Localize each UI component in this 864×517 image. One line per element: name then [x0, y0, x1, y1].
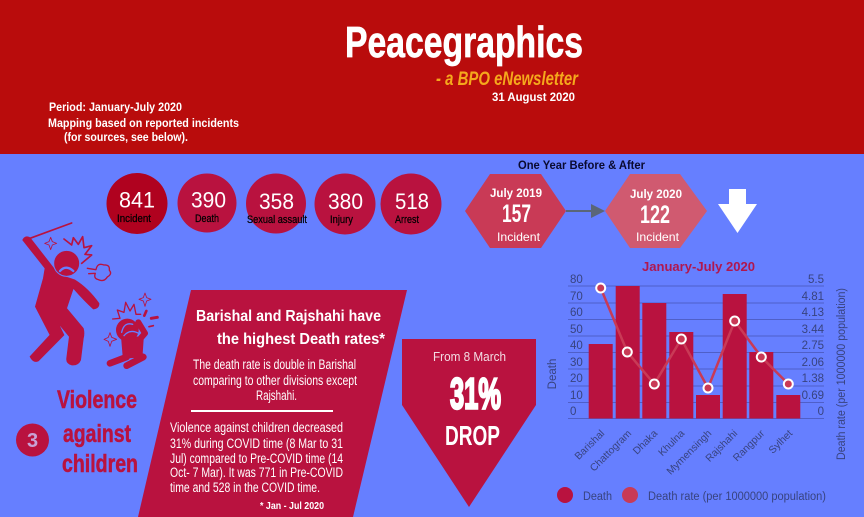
footnote: * Jan - Jul 2020 — [260, 501, 324, 512]
category labels: Barishal — [573, 428, 607, 462]
legend: Death — [583, 491, 612, 503]
period note — [48, 102, 239, 144]
panel body text: Jul) compared to Pre-COVID time (14 — [170, 451, 343, 466]
stat: injury — [314, 174, 376, 234]
left axis labels: 40 — [570, 340, 583, 352]
left axis labels: 20 — [570, 373, 583, 385]
panel: death rates — [138, 290, 407, 517]
right axis title: Death rate (per 1000000 population) — [836, 288, 848, 460]
stat: sexual assault — [246, 174, 307, 234]
stat: death: Death — [195, 213, 219, 225]
category labels: Mymensingh — [665, 428, 714, 477]
panel summary: The death rate is double in Barishal — [193, 357, 356, 372]
panel heading: Barishal and Rajshahi have — [196, 308, 381, 325]
period note: Mapping based on reported incidents — [48, 118, 239, 130]
before and after heading: One Year Before & After — [518, 158, 645, 172]
stat: arrest: 518 — [395, 189, 429, 214]
left axis labels: 10 — [570, 390, 583, 402]
panel body text: Oct- 7 Mar). It was 771 in Pre-COVID — [170, 465, 343, 480]
icon: adult hitting child — [23, 223, 157, 366]
hexagon: July 2019: 157 — [502, 200, 531, 228]
left axis labels: 0 — [570, 406, 576, 418]
number badge 3: 3 — [27, 430, 38, 452]
panel heading — [196, 308, 386, 348]
category labels: Sylhet — [767, 428, 795, 456]
right axis labels: 4.81 — [802, 291, 824, 303]
category labels: Chattogram — [588, 428, 634, 474]
chart title: January-July 2020 — [642, 259, 755, 274]
panel heading: the highest Death rates* — [217, 331, 386, 348]
stat: incident — [106, 173, 168, 234]
subtitle: - a BPO eNewsletter — [436, 69, 579, 90]
stat: arrest: Arrest — [395, 214, 419, 226]
left axis labels: 50 — [570, 324, 583, 336]
right axis labels: 0.69 — [802, 390, 824, 402]
heading: violence against children: Violence — [57, 386, 137, 414]
icon: white down arrow — [718, 189, 757, 233]
left axis title: Death — [547, 359, 559, 389]
arrow: July 2019 to July 2020 — [566, 204, 605, 218]
icon: adult figure — [23, 223, 111, 365]
legend: Death rate (per 1000000 population) — [648, 491, 826, 503]
panel body text — [170, 420, 343, 495]
stat: sexual assault: Sexual assault — [247, 214, 307, 226]
period note: (for sources, see below). — [64, 132, 188, 144]
right axis labels: 1.38 — [802, 373, 824, 385]
right axis labels: 0 — [818, 406, 824, 418]
date: 31 August 2020 — [492, 92, 575, 104]
hexagon: July 2019: Incident — [497, 230, 541, 244]
stat: incident: 841 — [119, 188, 155, 212]
stat: arrest — [380, 174, 442, 234]
right axis labels: 4.13 — [802, 307, 824, 319]
right axis labels: 2.75 — [802, 340, 824, 352]
heading: violence against children: children — [62, 450, 138, 478]
category labels: Khulna — [657, 428, 687, 459]
panel summary: Rajshahi. — [256, 388, 297, 403]
hexagon: July 2019 — [465, 174, 566, 248]
legend — [557, 487, 826, 503]
panel summary — [193, 357, 357, 403]
hexagon: July 2020 — [605, 174, 707, 248]
left axis labels — [570, 274, 583, 418]
title: Peacegraphics — [345, 18, 583, 67]
stat: death — [178, 174, 236, 232]
category labels: Rajshahi — [704, 428, 740, 464]
left axis labels: 30 — [570, 357, 583, 369]
callout: 31% drop — [402, 339, 536, 507]
stat: injury: 380 — [328, 189, 363, 214]
line: death rate — [596, 284, 793, 392]
heading: violence against children: against — [63, 420, 132, 448]
hexagon: July 2020: July 2020 — [630, 187, 682, 201]
stat: sexual assault: 358 — [259, 189, 294, 214]
callout: 31% drop: DROP — [445, 420, 500, 451]
panel body text: Violence against children decreased — [170, 420, 343, 435]
bars: death — [589, 286, 800, 418]
right axis labels: 5.5 — [808, 274, 824, 286]
stat circles — [106, 173, 442, 234]
panel body text: time and 528 in the COVID time. — [170, 480, 320, 495]
header band — [0, 0, 864, 154]
hexagon: July 2019: July 2019 — [490, 186, 542, 200]
right axis labels: 3.44 — [802, 324, 825, 336]
stat: incident: Incident — [117, 213, 151, 225]
category labels: Dhaka — [631, 428, 660, 457]
stat: injury: Injury — [330, 214, 353, 226]
category labels — [573, 428, 795, 477]
left axis labels: 60 — [570, 307, 583, 319]
heading: violence against children — [57, 386, 138, 478]
category labels: Rangpur — [731, 428, 768, 464]
stat: death: 390 — [191, 188, 226, 212]
right axis labels — [802, 274, 825, 418]
callout: 31% drop: 31% — [450, 370, 501, 418]
panel summary: comparing to other divisions except — [193, 373, 357, 388]
period note: Period: January-July 2020 — [49, 102, 182, 114]
panel body text: 31% during COVID time (8 Mar to 31 — [170, 436, 343, 451]
icon: child figure — [104, 293, 157, 366]
hexagon: July 2020: 122 — [640, 201, 670, 229]
chart: deaths and death rate by division — [547, 259, 848, 503]
left axis labels: 70 — [570, 291, 583, 303]
left axis labels: 80 — [570, 274, 583, 286]
number badge 3 — [16, 424, 49, 456]
hexagon: July 2020: Incident — [636, 230, 680, 244]
callout: 31% drop: From 8 March — [433, 350, 506, 364]
right axis labels: 2.06 — [802, 357, 824, 369]
